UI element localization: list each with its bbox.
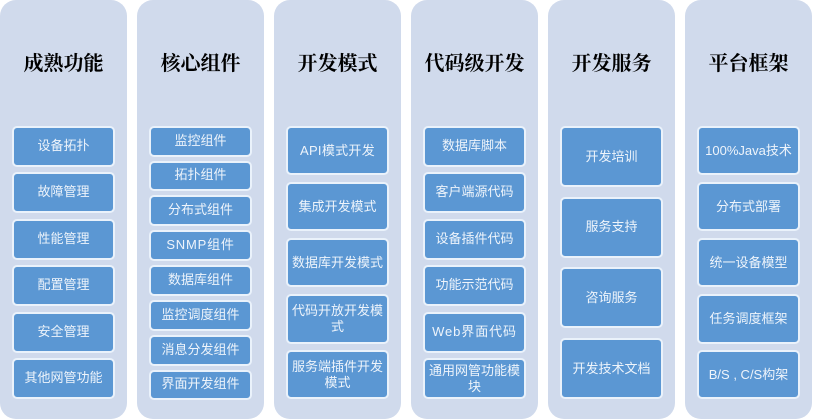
item: Web界面代码: [432, 324, 517, 338]
item: 开发培训: [585, 148, 638, 164]
item: [12, 358, 115, 399]
panel: 开发服务: [548, 0, 675, 419]
item: [286, 350, 389, 399]
item: [697, 350, 800, 399]
heading: 开发服务: [572, 47, 652, 76]
item: 服务端插件开发模式: [292, 358, 383, 390]
item: [697, 294, 800, 344]
item: [286, 238, 389, 287]
heading: 开发模式: [298, 47, 378, 76]
heading: 成熟功能: [24, 47, 104, 76]
item: 代码开放开发模式: [292, 303, 383, 334]
heading: 核心组件: [160, 47, 240, 76]
item: 客户端源代码: [435, 184, 514, 198]
item: [560, 197, 663, 258]
item: 开发技术文档: [572, 360, 650, 376]
item: SNMP组件: [166, 236, 235, 252]
item: [149, 161, 252, 191]
item: [149, 370, 252, 400]
item: [286, 126, 389, 175]
item: [697, 182, 800, 231]
heading: 平台框架: [708, 47, 788, 76]
item: 数据库组件: [168, 272, 233, 286]
item: 服务支持: [585, 218, 638, 234]
panel: 核心组件: [137, 0, 264, 419]
item: [12, 172, 115, 213]
item: [12, 126, 115, 167]
item: 配置管理: [37, 276, 90, 292]
item: [423, 312, 526, 353]
item: [560, 126, 663, 187]
item: B/S , C/S构架: [709, 366, 788, 382]
item: [149, 195, 252, 226]
item: [423, 126, 526, 167]
item: 分布式部署: [716, 198, 781, 214]
item: 其他网管功能: [24, 370, 102, 384]
item: [423, 358, 526, 399]
item: [12, 219, 115, 260]
item: [12, 312, 115, 353]
item: [423, 172, 526, 213]
item: [149, 335, 252, 366]
item: 咨询服务: [585, 290, 638, 304]
item: 设备拓扑: [37, 138, 90, 152]
item: 安全管理: [37, 324, 90, 338]
item: API模式开发: [300, 142, 375, 158]
item: 拓扑组件: [174, 167, 226, 182]
item: 任务调度框架: [709, 311, 788, 326]
item: [286, 294, 389, 344]
item: [149, 230, 252, 261]
item: 数据库开发模式: [292, 254, 383, 270]
item: [697, 126, 800, 175]
item: [697, 238, 800, 287]
panel: 代码级开发: [411, 0, 538, 419]
item: [560, 267, 663, 328]
item: [149, 265, 252, 296]
item: 监控组件: [174, 132, 226, 148]
item: 功能示范代码: [435, 276, 514, 292]
item: 设备插件代码: [435, 230, 514, 246]
item: [149, 300, 252, 331]
item: 100%Java技术: [705, 142, 792, 158]
item: [12, 265, 115, 306]
item: 监控调度组件: [161, 306, 240, 322]
item: [423, 219, 526, 260]
item: 统一设备模型: [709, 254, 788, 270]
item: [286, 182, 389, 231]
item: [560, 338, 663, 399]
item: 故障管理: [37, 184, 90, 198]
item: [423, 265, 526, 306]
item: 界面开发组件: [161, 376, 240, 391]
item: 数据库脚本: [442, 138, 507, 152]
item: 性能管理: [37, 230, 90, 246]
item: [149, 126, 252, 157]
panel: 开发模式: [274, 0, 401, 419]
panel: 平台框架: [685, 0, 812, 419]
item: 集成开发模式: [298, 198, 376, 214]
item: 消息分发组件: [161, 342, 240, 356]
item: 分布式组件: [168, 202, 233, 216]
item: 通用网管功能模块: [429, 362, 520, 394]
panel: 成熟功能: [0, 0, 127, 419]
heading: 代码级开发: [424, 47, 524, 76]
